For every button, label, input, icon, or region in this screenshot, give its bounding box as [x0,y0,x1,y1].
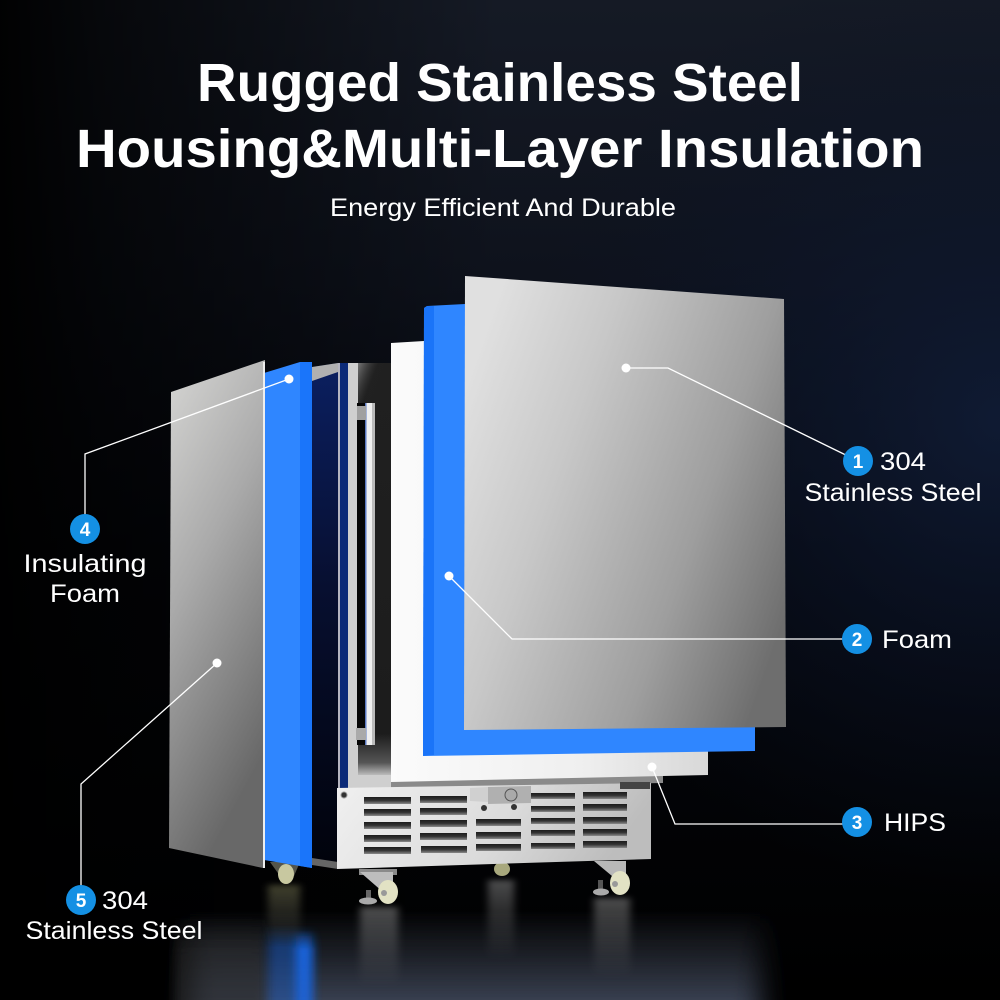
title [76,53,924,179]
panel: 5 left steel sheet [169,360,265,868]
shadow band under white sheet [391,774,663,788]
callout 1: 304 Stainless Steel: 304 [880,448,926,476]
floor reflection [175,880,760,1000]
callout 5: 304 Stainless Steel: 304 [102,887,148,915]
callout 4: Insulating Foam: Insulating [24,550,146,578]
callout 3: HIPS [648,762,946,837]
door handle [356,403,375,745]
hinge [620,782,650,789]
lock plate [470,786,531,811]
subtitle: Energy Efficient And Durable [330,194,676,222]
caster: rear left [270,862,300,884]
side panel navy [312,363,338,862]
callout 4: Insulating Foam: Foam [50,580,120,608]
callout 4: Insulating Foam: 4 [80,520,91,541]
caster: front right [593,861,630,896]
callout 1: 304 Stainless Steel: Stainless Steel [804,479,982,507]
callout 1: 304 Stainless Steel [622,364,982,507]
refrigerator body [270,363,663,904]
panel: 4 left insulating foam [263,362,312,868]
callout 2: Foam: Foam [882,626,952,654]
callout 5: 304 Stainless Steel [26,658,222,945]
callout 2: Foam [444,572,952,654]
callout 1: 304 Stainless Steel: 1 [853,452,864,473]
callout 5: 304 Stainless Steel: Stainless Steel [26,917,202,945]
callout 3: HIPS: 3 [852,813,862,834]
callout 2: Foam: 2 [852,630,862,651]
door face [348,363,391,788]
panel: 2 blue foam [423,304,755,756]
base grille panel [337,783,651,869]
panel: 1 stainless steel sheet [464,276,786,730]
title: Housing&Multi-Layer Insulation [76,119,924,179]
callout 4: Insulating Foam [24,374,294,608]
vent slots [364,792,627,854]
caster: front left [359,869,398,904]
caster: rear middle [494,862,510,876]
callout 5: 304 Stainless Steel: 5 [76,891,87,912]
title: Rugged Stainless Steel [197,53,803,113]
panel: 3 HIPS white sheet [391,320,708,782]
screw [341,792,347,798]
callout 3: HIPS: HIPS [884,809,946,837]
